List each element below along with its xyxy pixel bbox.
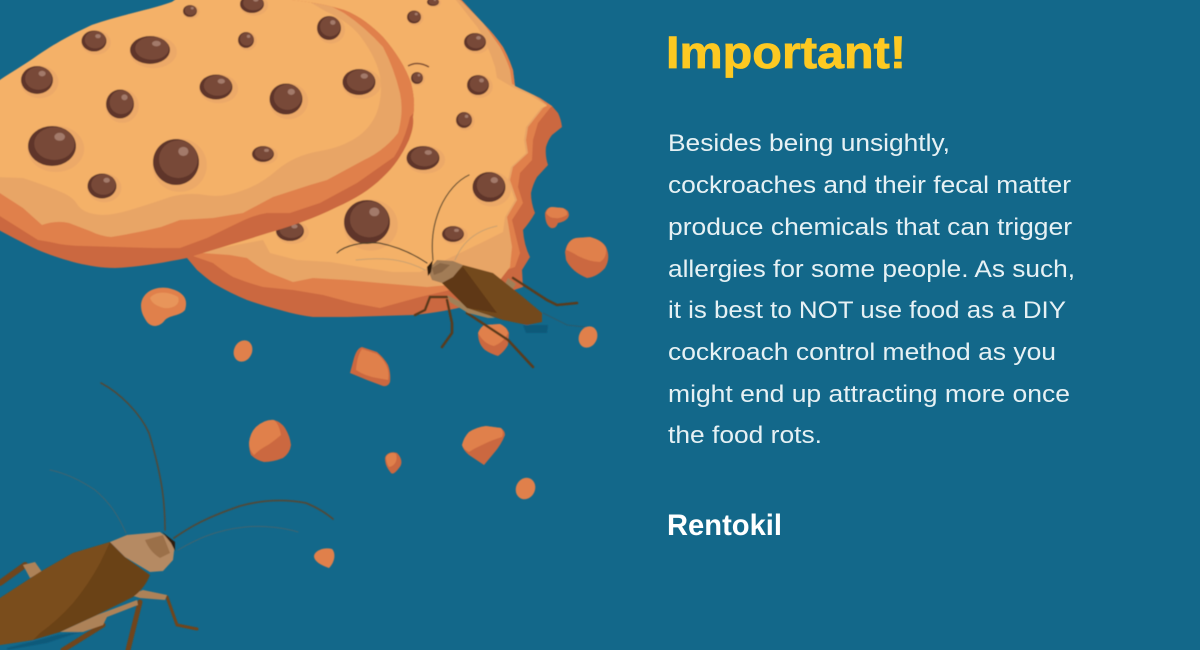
- back cookie: [180, 0, 580, 325]
- body text: [668, 130, 1075, 449]
- crumb 3: [565, 237, 608, 278]
- front cookie: [0, 0, 425, 285]
- crumb 2: [545, 207, 569, 228]
- underside: [447, 295, 495, 318]
- legs: [0, 562, 197, 650]
- crumb 7: [575, 323, 601, 351]
- body text: Besides being unsightly,: [668, 130, 950, 157]
- large cockroach bottom left: [0, 383, 333, 650]
- crumb 10: [462, 426, 505, 465]
- small cockroach on cookie: [337, 175, 585, 367]
- body text: produce chemicals that can trigger: [668, 214, 1072, 241]
- wings: [0, 542, 150, 646]
- faint rear leg: [543, 313, 585, 327]
- body text: might end up attracting more once: [668, 381, 1070, 408]
- crumb 8: [249, 420, 291, 462]
- crumb 9: [385, 452, 401, 474]
- shadow: [523, 325, 548, 333]
- text column: [666, 27, 1075, 542]
- crumb 12: [314, 548, 334, 568]
- legs: [415, 278, 577, 367]
- body text: cockroach control method as you: [668, 339, 1056, 366]
- crumb 4: [230, 337, 256, 365]
- antennae: [337, 175, 497, 270]
- pronotum: [110, 532, 175, 572]
- body text: allergies for some people. As such,: [668, 256, 1075, 283]
- cookies and crumbs artwork: [0, 0, 608, 650]
- femur tan: [505, 278, 516, 290]
- heading: Important!: [666, 27, 906, 78]
- pronotum: [428, 260, 463, 283]
- shadow: [7, 632, 80, 650]
- antennae: [50, 383, 333, 550]
- crumb 11: [512, 475, 539, 502]
- body text: it is best to NOT use food as a DIY: [668, 297, 1066, 324]
- logo: Rentokil: Rentokil: [667, 509, 782, 542]
- cookie crumbs: [141, 207, 608, 568]
- crumb 1: [141, 288, 186, 326]
- body text: the food rots.: [668, 422, 822, 449]
- crumb 6: [478, 324, 509, 356]
- body text: cockroaches and their fecal matter: [668, 172, 1071, 199]
- crumb 5: [350, 347, 390, 386]
- wings: [442, 265, 542, 325]
